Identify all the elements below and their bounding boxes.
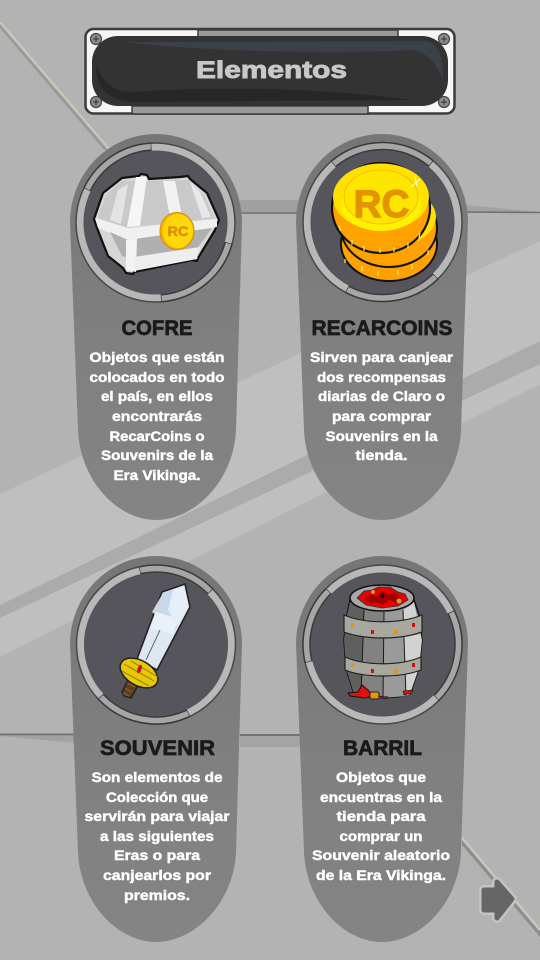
description: recarcoins: Sirven para canjear [310,350,454,366]
description: souvenir: premios. [124,888,190,904]
description: cofre: encontrarás [112,409,202,425]
title text: Elementos [196,57,347,84]
description: souvenir [84,770,230,904]
icon: sword [115,584,190,698]
description: barril: Objetos que [336,770,426,786]
description: recarcoins: tienda. [356,448,408,464]
description: barril: comprar un [340,829,422,845]
description: recarcoins: diarias de Claro o [318,389,445,405]
description: souvenir: canjearlos por [103,868,212,884]
description: cofre: el país, en ellos [101,389,213,405]
description: recarcoins: Souvenirs en la [326,429,438,445]
description: cofre: Souvenirs de la [101,448,213,464]
description: barril [312,770,450,884]
heading: barril: BARRIL [343,736,422,760]
coin on chest: RC [168,223,188,239]
description: souvenir: Eras o para [114,848,200,864]
icon ring: souvenir [55,544,257,745]
description: cofre: RecarCoins o [110,429,205,445]
panel: recarcoins [275,115,490,520]
description: cofre: Era Vikinga. [114,468,200,484]
panel: cofre [54,121,257,520]
icon ring: recarcoins [275,115,490,329]
icon ring: barril [282,544,483,745]
icon: coin stack: RC [354,183,410,226]
icon: coin stack [332,163,437,281]
icon ring: cofre [54,121,257,324]
heading: recarcoins: RECARCOINS [312,316,452,340]
heading: souvenir: SOUVENIR [100,736,215,760]
description: barril: encuentras en la [320,790,442,806]
description: souvenir: Colección que [106,790,208,806]
description: recarcoins: para comprar [332,409,432,425]
arrow: next [484,882,512,918]
description: souvenir: servirán para viajar [84,809,230,825]
description: recarcoins [310,350,454,464]
description: cofre: colocados en todo [90,370,225,386]
description: souvenir: a las siguientes [100,829,214,845]
icon: barrel [344,585,422,699]
description: barril: Souvenir aleatorio [312,848,450,864]
description: barril: de la Era Vikinga. [316,868,446,884]
panel: barril [282,544,483,942]
heading: cofre: COFRE [122,316,192,340]
description: cofre [90,350,225,484]
description: cofre: Objetos que están [90,350,224,366]
title banner [86,29,454,114]
description: barril: tienda para [336,809,426,825]
description: souvenir: Son elementos de [92,770,223,786]
panel: souvenir [55,544,257,942]
description: recarcoins: dos recompensas [317,370,446,386]
icon: chest [94,174,219,274]
